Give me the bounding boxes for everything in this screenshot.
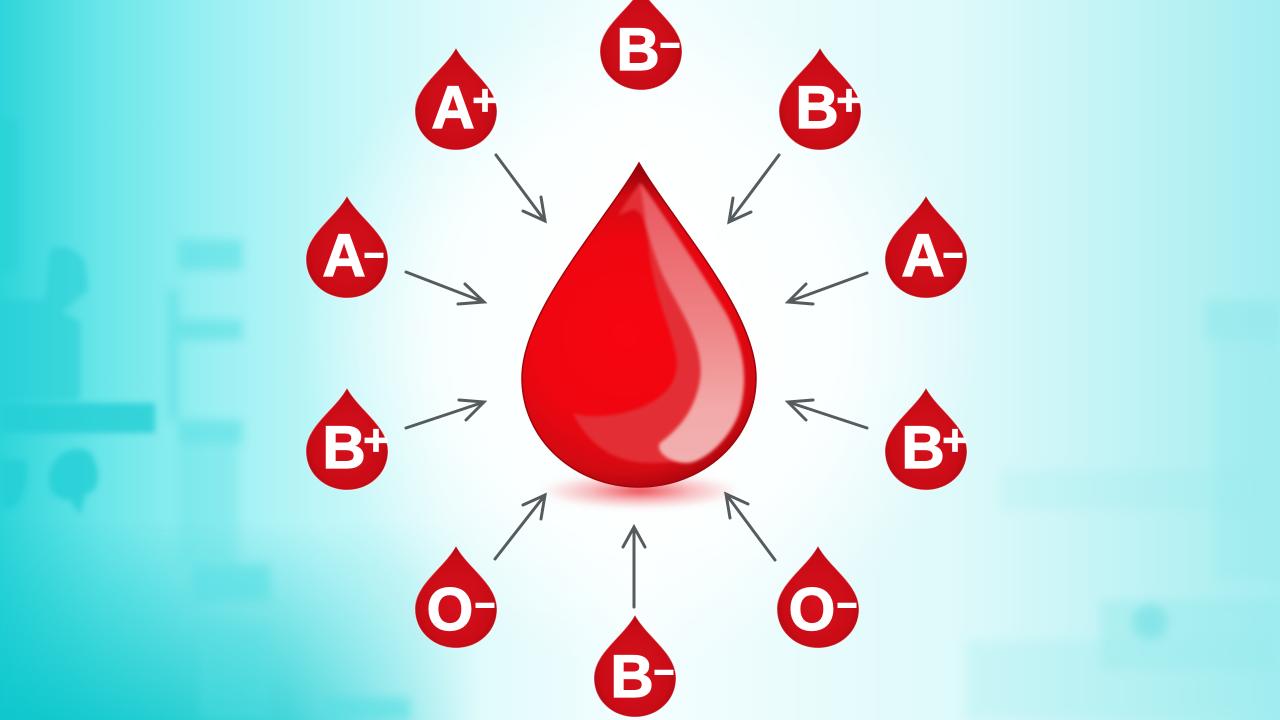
drop: B- top: B: [616, 16, 660, 83]
drop: A- left: [306, 196, 388, 298]
drop: A- right: −: [943, 236, 963, 275]
arrow: A- left to centre: [406, 272, 484, 304]
arrow: A- right to centre: [788, 273, 867, 304]
drop: B+ left: +: [363, 416, 389, 465]
drop: B+ left: [306, 388, 389, 490]
drop: A- right: [885, 196, 967, 298]
arrow: B+ left to centre: [406, 400, 484, 428]
drop: A- right: A: [901, 222, 945, 289]
drop: B- top: −: [660, 26, 680, 65]
drop: A- left: A: [322, 222, 366, 289]
drop: O- left: −: [475, 586, 495, 625]
arrow: B+ top right to centre: [729, 155, 779, 222]
drop: B+ right: +: [942, 416, 968, 465]
drop: O- left: O: [427, 576, 473, 643]
drop: B+ top right: +: [836, 76, 862, 125]
drop: B+ right: B: [901, 414, 945, 481]
arrow: A+ to centre: [496, 155, 545, 221]
drop: B- bottom: [594, 615, 676, 717]
arrow: O- left to centre: [495, 495, 545, 559]
drop body: [522, 163, 756, 487]
drop: O- right: O: [789, 576, 835, 643]
drop: O- left: [415, 546, 497, 648]
drop: B- top: [600, 0, 682, 90]
drop: O- right: [777, 546, 859, 648]
drop: B+ left: B: [322, 414, 366, 481]
arrow: O- right to centre: [726, 494, 775, 560]
drop: A- left: −: [364, 236, 384, 275]
arrow: B+ right to centre: [788, 400, 867, 428]
drop: A+: A: [431, 74, 475, 141]
drop: A+: [415, 48, 498, 150]
drop: O- right: −: [837, 586, 857, 625]
drop: B+ top right: [779, 48, 862, 150]
drop: B- bottom: B: [610, 643, 654, 710]
drop shadow: [540, 473, 740, 509]
drop highlights: [573, 183, 744, 463]
drop: B+ top right: B: [795, 74, 839, 141]
central blood drop: [522, 163, 756, 509]
drop: A+: +: [472, 76, 498, 125]
drop: B+ right: [885, 388, 968, 490]
drop: B- bottom: −: [654, 653, 674, 692]
arrow: B- bottom to centre: [623, 527, 645, 607]
